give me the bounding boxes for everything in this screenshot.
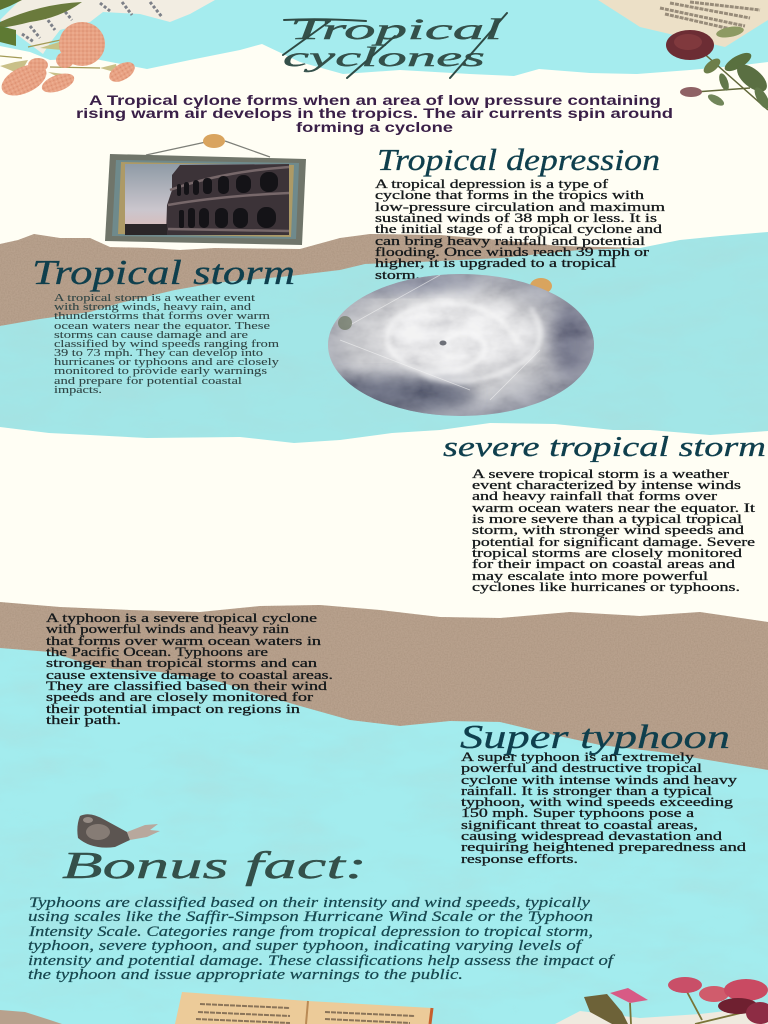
text: typhoon: They are classified based on their wind: [46, 679, 327, 693]
text: Super typhoon: requiring heightened preparedness and: [461, 840, 746, 854]
collage: coral flowers top left: [0, 22, 138, 102]
torn brown band: upper: [0, 234, 640, 326]
text: bonus fact: using scales like the Saffir-Simpson Hurricane Wind Scale or the Typhoon: [28, 909, 593, 925]
text: bonus fact: typhoon, severe typhoon, and super typhoon, indicating varying levels of: [28, 938, 584, 954]
text: Tropical storm: A tropical storm is a weather event: [54, 293, 255, 304]
text: Super typhoon: [461, 750, 746, 866]
framed Colosseum picture: [105, 134, 306, 245]
text: Tropical storm: storms can cause damage and are: [54, 330, 248, 341]
text: typhoon: A typhoon is a severe tropical cyclone: [46, 611, 317, 625]
text: Tropical storm: 39 to 73 mph. They can develop into: [54, 348, 263, 359]
text: severe tropical storm: potential for significant damage. Severe: [472, 535, 755, 549]
intro text: [76, 93, 673, 135]
heading: Bonus fact: Bonus fact:: [62, 845, 367, 887]
text: Tropical depression: the initial stage of a tropical cyclone and: [375, 222, 662, 236]
text: typhoon: stronger than tropical storms and can: [46, 656, 317, 670]
text: bonus fact: Intensity Scale. Categories range from tropical depression to tropical storm,: [28, 924, 593, 940]
text: Tropical storm: [54, 293, 280, 396]
text: Super typhoon: significant threat to coastal areas,: [461, 818, 698, 832]
text: typhoon: their path.: [46, 713, 121, 727]
text: Super typhoon: powerful and destructive tropical: [461, 761, 703, 775]
text: typhoon: with powerful winds and heavy rain: [46, 622, 289, 636]
text: Tropical storm: monitored to provide early warnings: [54, 366, 267, 377]
text: typhoon: that forms over warm ocean waters in: [46, 634, 321, 648]
text: severe tropical storm: warm ocean waters near the equator. It: [472, 501, 756, 515]
icon: pin behind satellite image: [530, 278, 552, 294]
text: bonus fact: intensity and potential damage. These classifications help assess the impact of: [28, 953, 616, 969]
heading: Super typhoon: Super typhoon: [460, 719, 730, 756]
text: Tropical depression: sustained winds of 38 mph or less. It is: [375, 211, 657, 225]
text: severe tropical storm: is more severe than a typical tropical: [472, 512, 743, 526]
text: severe tropical storm: tropical storms are closely monitored: [472, 546, 742, 560]
text: Tropical storm: and prepare for potential coastal: [54, 376, 242, 387]
text: Tropical depression: low-pressure circulation and maximum: [375, 200, 666, 214]
text: Tropical storm: classified by wind speeds ranging from: [54, 339, 280, 350]
intro text: forming a cyclone: [296, 120, 454, 135]
text: Tropical depression: higher, it is upgraded to a tropical: [375, 256, 617, 270]
text: severe tropical storm: A severe tropical storm is a weather: [472, 467, 729, 481]
text: Super typhoon: 150 mph. Super typhoons pose a: [461, 806, 695, 820]
icon: hanging pin and strings: [146, 134, 270, 157]
text: Super typhoon: causing widespread devastation and: [461, 829, 722, 843]
collage: green leaves top left: [0, 0, 82, 50]
text: Super typhoon: rainfall. It is stronger than a typical: [461, 784, 713, 798]
collage: flowers and paper bottom right: [555, 977, 768, 1024]
collage: rose and leaves top right: [666, 25, 768, 111]
text: typhoon: the Pacific Ocean. Typhoons are: [46, 645, 268, 659]
title: [283, 13, 507, 78]
text: Tropical storm: ocean waters near the equator. These: [54, 321, 270, 332]
text: severe tropical storm: and heavy rainfall that forms over: [472, 489, 717, 503]
intro text: A Tropical cylone forms when an area of low pressure containing: [89, 93, 661, 108]
text: bonus fact: the typhoon and issue appropriate warnings to the public.: [28, 967, 463, 983]
title: Tropical: [290, 13, 502, 46]
text: severe tropical storm: storm, with stronger wind speeds and: [472, 523, 744, 537]
satellite image of cyclone: [315, 274, 594, 416]
text: typhoon: their potential impact on regions in: [46, 702, 300, 716]
text: severe tropical storm: for their impact on coastal areas and: [472, 557, 735, 571]
text: severe tropical storm: event characterized by intense winds: [472, 478, 741, 492]
text: Tropical depression: [375, 177, 666, 282]
torn teal band: top: [0, 0, 768, 76]
collage: open book top right: [598, 0, 768, 47]
text: Super typhoon: typhoon, with wind speeds exceeding: [461, 795, 733, 809]
text: Tropical storm: impacts.: [54, 385, 102, 396]
text: Tropical depression: flooding. Once winds reach 39 mph or: [375, 245, 649, 259]
text: Super typhoon: A super typhoon is an extremely: [461, 750, 695, 764]
heading: severe tropical storm: severe tropical storm: [443, 431, 766, 463]
text: Super typhoon: response efforts.: [461, 852, 578, 866]
text: severe tropical storm: may escalate into more powerful: [472, 569, 709, 583]
torn brown band: lower: [0, 602, 768, 775]
text: bonus fact: [28, 895, 616, 983]
text: Tropical depression: can bring heavy rainfall and potential: [375, 234, 646, 248]
heading: Tropical storm: Tropical storm: [32, 253, 295, 292]
text: Tropical depression: storm.: [375, 268, 420, 282]
text: severe tropical storm: cyclones like hurricanes or typhoons.: [472, 580, 740, 594]
text: Tropical storm: hurricanes or typhoons and are closely: [54, 357, 280, 368]
intro text: rising warm air develops in the tropics. The air currents spin around: [76, 106, 673, 121]
text: Tropical storm: with strong winds, heavy rain, and: [54, 302, 252, 313]
text: Super typhoon: cyclone with intense winds and heavy: [461, 773, 738, 787]
text: typhoon: [46, 611, 333, 727]
text: bonus fact: Typhoons are classified based on their intensity and wind speeds, typically: [29, 895, 591, 911]
title: cyclones: [283, 42, 485, 72]
heading: Tropical depression: Tropical depression: [377, 142, 660, 177]
torn teal band: bottom: [0, 648, 768, 1024]
icon: butterfly: [77, 814, 160, 848]
torn teal band: middle: [0, 232, 768, 443]
text: Tropical depression: cyclone that forms in the tropics with: [375, 188, 644, 202]
text: Tropical storm: thunderstorms that forms over warm: [54, 311, 271, 322]
text: severe tropical storm: [472, 467, 756, 594]
brown scrap: bottom left corner: [0, 1010, 62, 1024]
collage: open book bottom: [175, 992, 432, 1024]
text: typhoon: cause extensive damage to coastal areas.: [46, 668, 333, 682]
collage: torn book page top left: [0, 0, 215, 54]
text: Tropical depression: A tropical depression is a type of: [375, 177, 609, 191]
text: typhoon: speeds and are closely monitored for: [46, 690, 313, 704]
